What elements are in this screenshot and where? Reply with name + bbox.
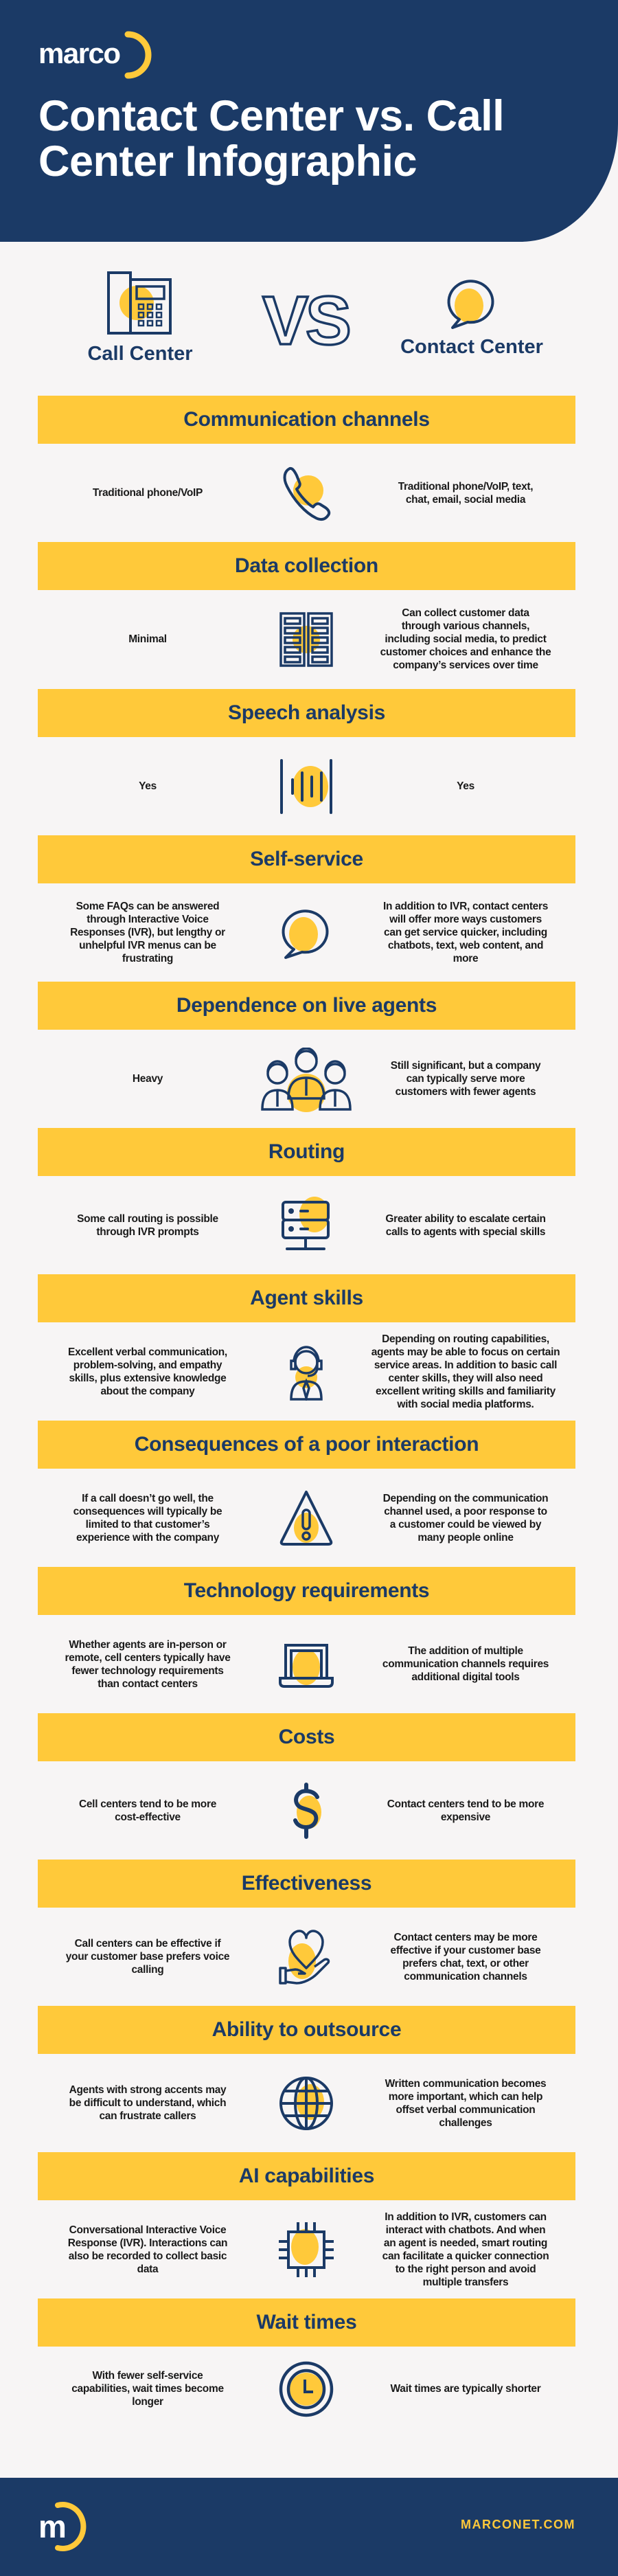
icon: laptop <box>279 1644 334 1688</box>
row: AI capabilities: Conversational Interactive Voice <box>69 2224 226 2235</box>
banner: Speech analysis <box>38 689 575 737</box>
row: costs: Contact centers tend to be more <box>387 1798 544 1809</box>
row: technology requirements: fewer technology requirements <box>71 1665 224 1676</box>
row: consequences: a customer could be viewed by <box>390 1518 541 1530</box>
icon: sound wave <box>280 759 332 814</box>
row: effectiveness: prefers chat, text, or other <box>402 1958 529 1969</box>
icon: clock <box>279 2362 334 2417</box>
row: self-service: more <box>453 953 478 964</box>
banner: AI capabilities <box>38 2152 575 2200</box>
banner: Dependence on live agents: Dependence on live agents <box>176 994 437 1017</box>
row: outsource: Written communication becomes <box>385 2077 546 2090</box>
footer logo: m: m <box>38 2509 65 2544</box>
banner: Wait times: Wait times <box>257 2311 356 2334</box>
row: dependence on live agents: can typically serve more <box>407 1073 525 1085</box>
row: outsource: challenges <box>439 2117 492 2128</box>
banner: Self-service: Self-service <box>250 848 363 870</box>
row: wait times: longer <box>132 2396 163 2408</box>
banner: Wait times <box>38 2298 575 2347</box>
row: self-service: unhelpful IVR menus can be <box>79 940 216 951</box>
row: wait times: capabilities, wait times become <box>71 2383 224 2395</box>
row: self-service: Some FAQs can be answered <box>76 901 219 912</box>
banner: Costs <box>38 1713 575 1761</box>
icon: warning triangle <box>280 1491 332 1546</box>
icon: three agents <box>261 1048 352 1112</box>
footer logo: m <box>38 2502 87 2551</box>
icon: server racks <box>279 612 333 667</box>
banner: Speech analysis: Speech analysis <box>228 701 385 724</box>
row: technology requirements <box>65 1639 549 1690</box>
title: Contact Center vs. Call <box>38 92 504 140</box>
header background <box>0 0 618 242</box>
label: Call Center: Call Center <box>87 343 193 365</box>
row: agent skills: excellent writing skills and familiarity <box>376 1385 556 1397</box>
row: AI capabilities: In addition to IVR, customers can <box>385 2211 547 2223</box>
row: AI capabilities: multiple transfers <box>423 2276 508 2287</box>
row: effectiveness: Call centers can be effective if <box>75 1938 220 1950</box>
banner: Agent skills: Agent skills <box>250 1287 363 1309</box>
banner: Ability to outsource: Ability to outsource <box>212 2018 401 2041</box>
row: dependence on live agents: Heavy <box>133 1073 163 1085</box>
row: effectiveness <box>66 1930 541 1985</box>
icon: globe <box>279 2077 333 2130</box>
row: AI capabilities: Response (IVR). Interactions can <box>68 2237 227 2249</box>
row: dependence on live agents: Still significant, but a company <box>391 1060 540 1072</box>
row: AI capabilities: to the right person and avoid <box>396 2263 536 2275</box>
row: costs: Cell centers tend to be more <box>79 1798 216 1809</box>
row: AI capabilities: an agent is needed, smart routing <box>384 2237 547 2249</box>
row: dependence on live agents <box>133 1048 541 1112</box>
row: dependence on live agents: customers with fewer agents <box>396 1086 536 1098</box>
icon: chip <box>279 2222 334 2277</box>
row: agent skills: agents may be able to focus on certain <box>371 1346 560 1357</box>
row: speech analysis <box>139 759 474 814</box>
banner: Costs: Costs <box>279 1726 334 1748</box>
row: technology requirements: than contact centers <box>98 1677 198 1690</box>
row: consequences: consequences will typically be <box>73 1506 222 1517</box>
row: communication channels: Traditional phone/VoIP, text, <box>398 481 533 492</box>
banner: AI capabilities: AI capabilities <box>239 2165 374 2187</box>
row: self-service: can get service quicker, including <box>384 927 547 938</box>
icon: desk phone <box>107 271 172 335</box>
row: outsource <box>69 2077 546 2130</box>
icon: heart in hand <box>279 1930 330 1985</box>
row: data collection: Minimal <box>128 633 167 645</box>
icon: dollar sign <box>293 1783 321 1839</box>
row: costs: cost-effective <box>115 1811 181 1823</box>
banner: Agent skills <box>38 1274 575 1322</box>
row: effectiveness: calling <box>131 1964 163 1976</box>
row: communication channels: Traditional phone/VoIP <box>93 487 203 499</box>
row: data collection: company’s services over time <box>393 659 538 671</box>
row: consequences: If a call doesn’t go well, the <box>82 1492 214 1504</box>
row: data collection: customer choices and enhance the <box>380 646 551 658</box>
row: technology requirements: remote, cell centers typically have <box>65 1651 231 1664</box>
row: outsource: offset verbal communication <box>396 2103 535 2116</box>
row: technology requirements: Whether agents are in-person or <box>69 1639 227 1650</box>
row: AI capabilities: data <box>137 2263 158 2275</box>
label: Contact Center: Contact Center <box>400 336 543 358</box>
row: technology requirements: communication channels requires <box>382 1658 549 1670</box>
row: self-service <box>70 901 548 964</box>
row: agent skills: skills, plus extensive knowledge <box>69 1372 227 1383</box>
row: consequences: channel used, a poor response to <box>384 1506 547 1517</box>
icon: phone handset <box>283 467 331 521</box>
row: routing: Greater ability to escalate certain <box>385 1213 546 1224</box>
row: consequences: Depending on the communication <box>383 1492 548 1504</box>
row: self-service: will offer more ways customers <box>389 914 542 925</box>
icon: agent with headset <box>290 1346 323 1401</box>
footer url: MARCONET.COM <box>461 2518 575 2531</box>
row: speech analysis: Yes <box>457 780 474 792</box>
row: effectiveness: effective if your customer base <box>390 1944 540 1956</box>
row: outsource: Agents with strong accents may <box>69 2084 226 2096</box>
banner: Consequences of a poor interaction: Consequences of a poor interaction <box>135 1433 479 1456</box>
row: outsource: be difficult to understand, which <box>69 2097 226 2109</box>
banner: Dependence on live agents <box>38 982 575 1030</box>
banner: Communication channels: Communication channels <box>183 408 430 431</box>
icon: chat bubble <box>448 280 494 329</box>
row: routing: Some call routing is possible <box>77 1213 218 1224</box>
row: wait times <box>71 2362 541 2417</box>
banner: Consequences of a poor interaction <box>38 1421 575 1469</box>
footer <box>0 2478 618 2576</box>
row: consequences: many people online <box>417 1532 514 1543</box>
banner: Communication channels <box>38 396 575 444</box>
comparison header <box>87 271 543 365</box>
row: AI capabilities: can facilitate a quicker connection <box>382 2250 549 2261</box>
row: data collection <box>128 607 551 671</box>
row: self-service: In addition to IVR, contact centers <box>383 901 548 912</box>
row: agent skills: problem-solving, and empathy <box>73 1359 222 1371</box>
row: costs <box>79 1783 544 1839</box>
row: routing: through IVR prompts <box>96 1225 199 1238</box>
row: self-service: chatbots, text, web content, and <box>388 940 543 951</box>
row: wait times: Wait times are typically shorter <box>391 2383 540 2395</box>
row: effectiveness: your customer base prefers voice <box>66 1951 229 1963</box>
row: agent skills: Excellent verbal communication, <box>68 1346 227 1357</box>
row: effectiveness: communication channels <box>404 1970 527 1982</box>
logo: marco: marco <box>38 37 120 69</box>
banner: Effectiveness: Effectiveness <box>242 1872 371 1895</box>
row: routing <box>77 1197 546 1250</box>
row: data collection: Can collect customer data <box>402 607 529 619</box>
banner: Effectiveness <box>38 1860 575 1908</box>
row: costs: expensive <box>441 1811 490 1823</box>
icon: server network <box>282 1197 330 1250</box>
row: routing: calls to agents with special skills <box>386 1225 545 1238</box>
row: agent skills: center skills, they will also need <box>389 1372 542 1383</box>
row: outsource: more important, which can help <box>389 2091 542 2102</box>
row: self-service: Responses (IVR), but lengthy or <box>70 927 225 938</box>
row: data collection: through various channels, <box>402 620 529 632</box>
row: data collection: including social media, to predict <box>385 633 547 645</box>
row: outsource: can frustrate callers <box>99 2110 196 2122</box>
row: consequences <box>73 1491 548 1546</box>
title: Center Infographic <box>38 137 417 185</box>
banner: Technology requirements <box>38 1567 575 1615</box>
banner: Self-service <box>38 835 575 883</box>
row: agent skills: Depending on routing capabilities, <box>382 1333 549 1345</box>
row: agent skills: with social media platforms. <box>397 1399 534 1410</box>
row: consequences: experience with the company <box>76 1532 219 1543</box>
row: wait times: With fewer self-service <box>93 2370 203 2382</box>
row: AI capabilities: also be recorded to collect basic <box>69 2250 227 2261</box>
row: consequences: limited to that customer’s <box>86 1518 209 1530</box>
banner: Routing: Routing <box>268 1140 345 1163</box>
row: technology requirements: The addition of multiple <box>408 1645 523 1657</box>
row: speech analysis: Yes <box>139 780 157 792</box>
banner: Routing <box>38 1128 575 1176</box>
row: technology requirements: additional digital tools <box>411 1671 520 1683</box>
row: AI capabilities: interact with chatbots. And when <box>386 2224 545 2235</box>
row: self-service: frustrating <box>122 953 173 964</box>
row: agent skills: about the company <box>100 1385 194 1397</box>
row: self-service: through Interactive Voice <box>87 914 209 925</box>
banner: Ability to outsource <box>38 2006 575 2054</box>
logo: marco <box>38 32 151 78</box>
title <box>38 92 504 185</box>
row: agent skills: service areas. In addition to basic call <box>374 1359 557 1371</box>
banner: Data collection <box>38 542 575 590</box>
banner: Technology requirements: Technology requirements <box>184 1579 429 1602</box>
row: communication channels: chat, email, social media <box>406 493 525 506</box>
row: agent skills <box>68 1333 560 1410</box>
row: communication channels <box>93 467 533 521</box>
icon: chat bubble <box>282 909 328 959</box>
row: AI capabilities <box>68 2211 549 2287</box>
row: effectiveness: Contact centers may be more <box>394 1932 537 1943</box>
banner: Data collection: Data collection <box>235 554 378 577</box>
